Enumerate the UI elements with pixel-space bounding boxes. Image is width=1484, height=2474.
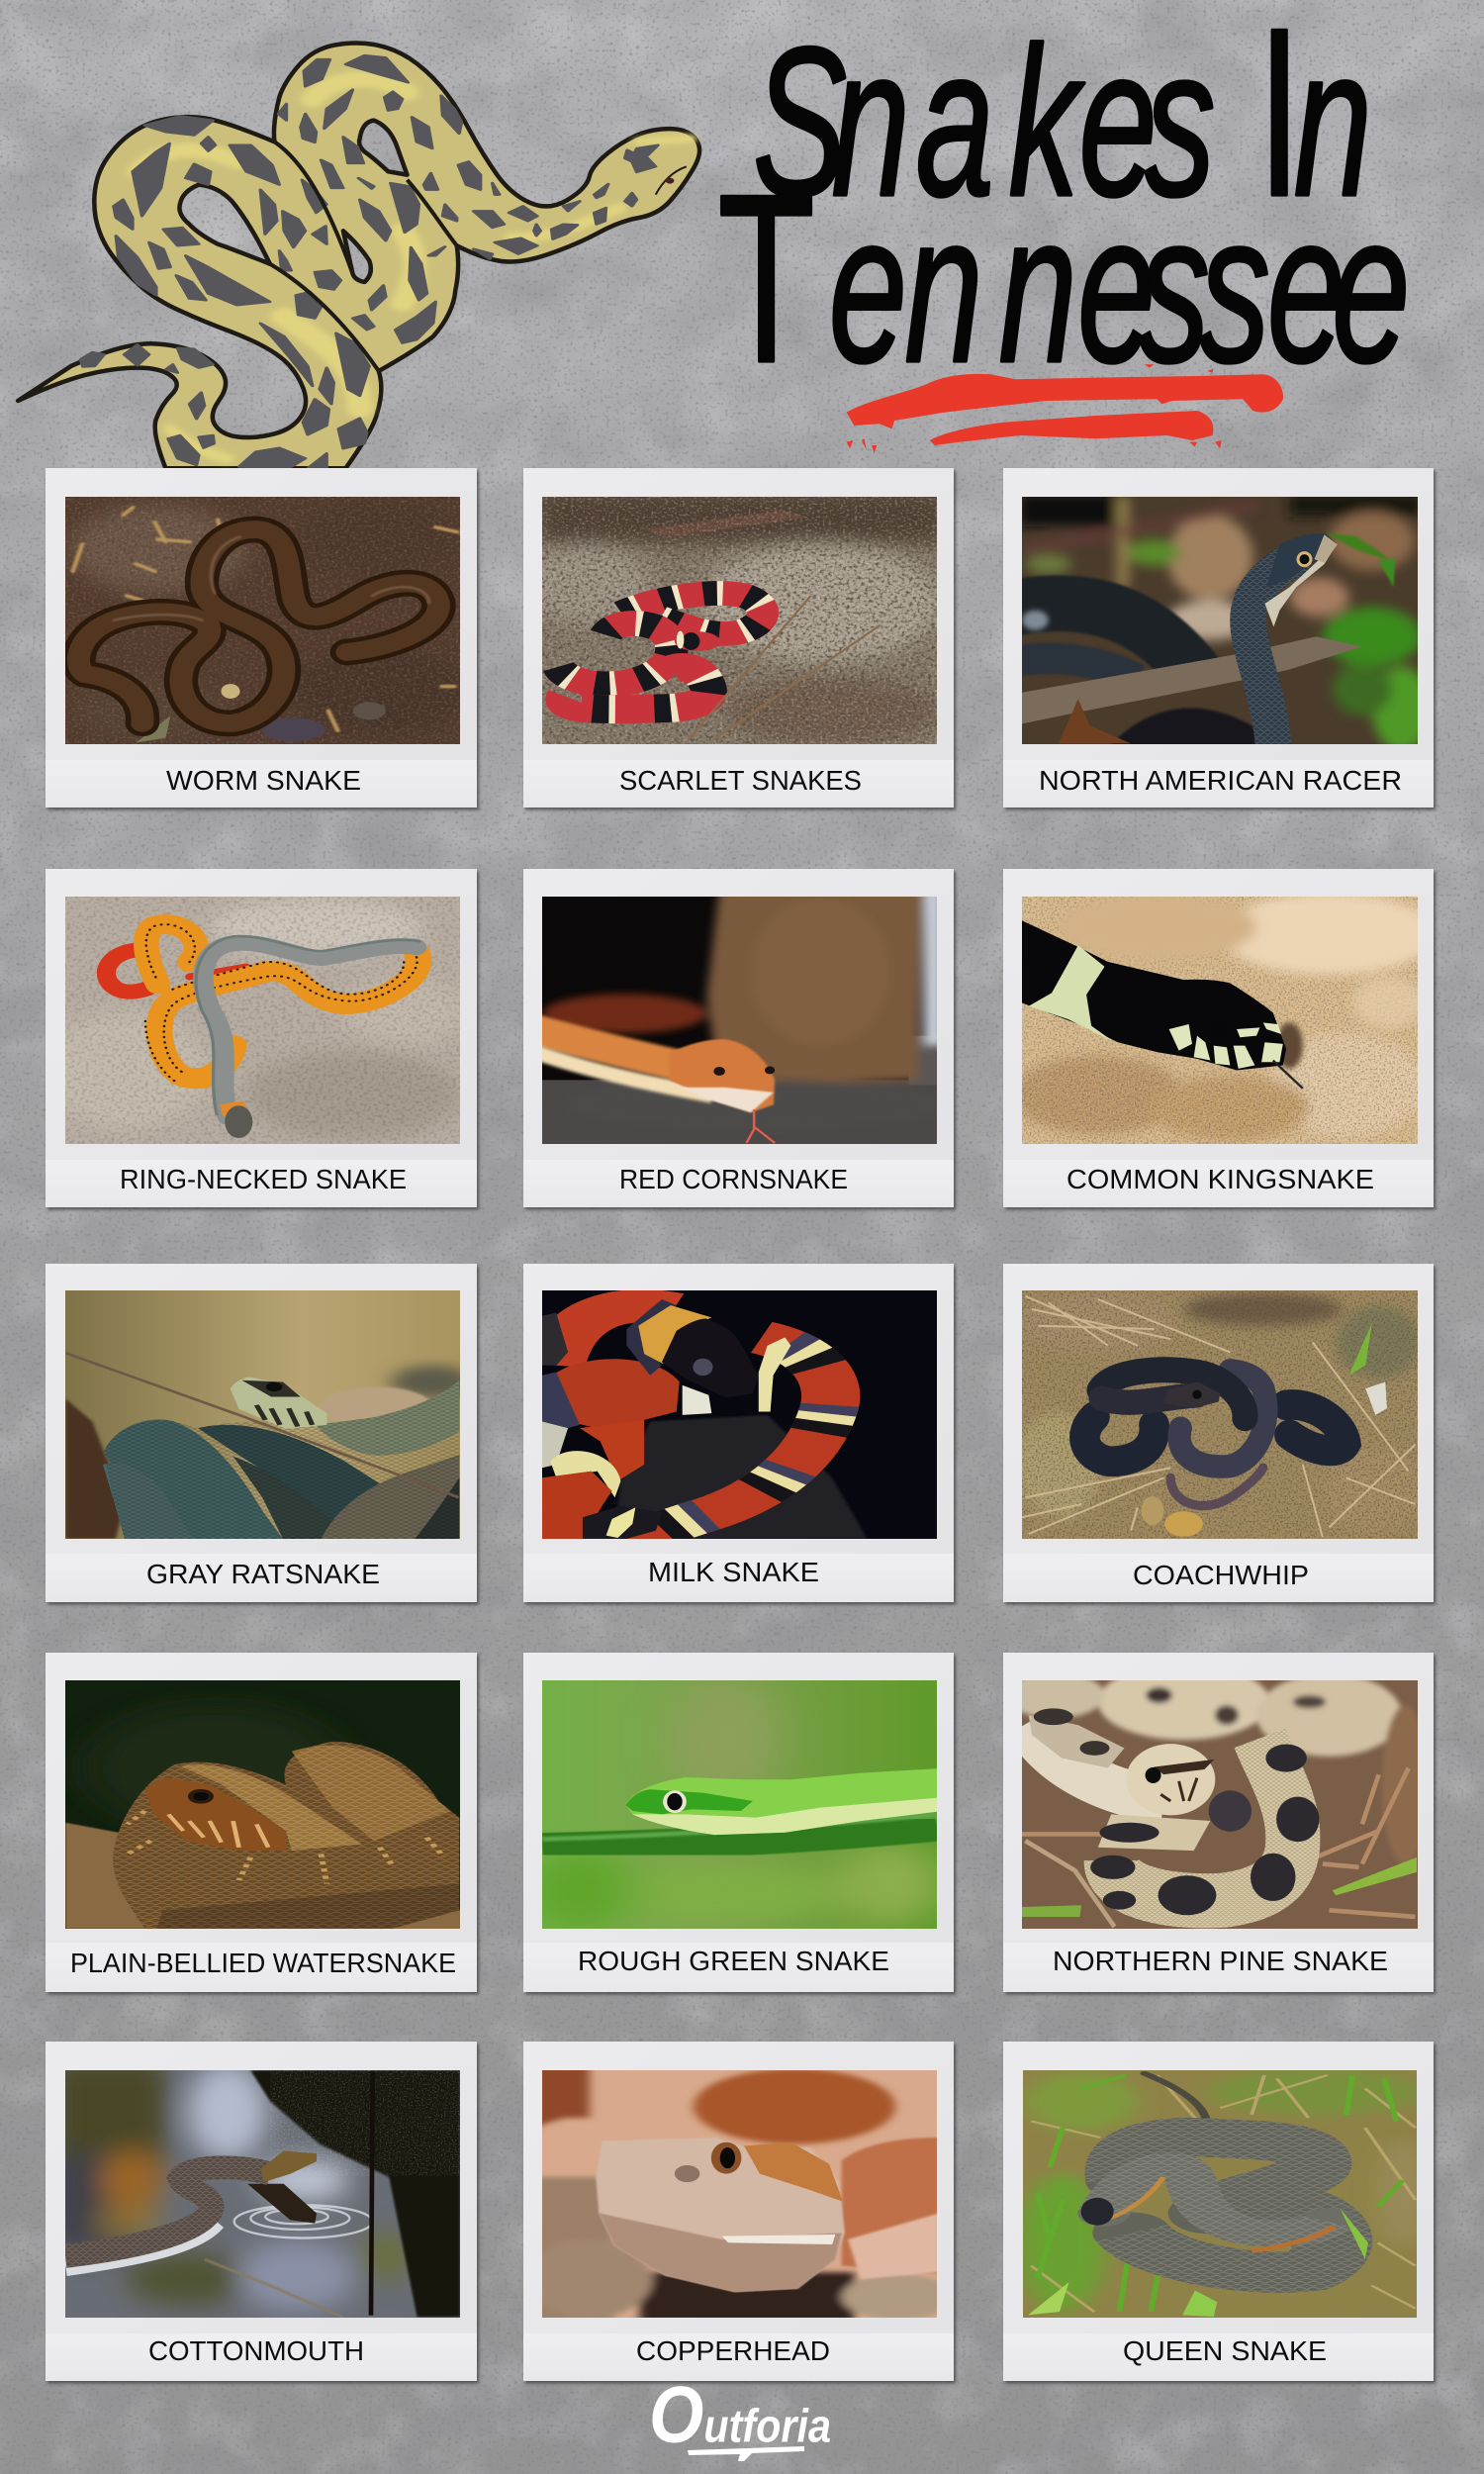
card frame <box>523 869 954 1207</box>
card frame <box>523 2042 954 2381</box>
card: red cornsnake <box>523 869 954 1207</box>
photo: scarlet snake on sand <box>542 497 937 744</box>
label: COACHWHIP <box>1133 1560 1309 1590</box>
photo: northern pine snake <box>1022 1680 1418 1929</box>
card: cottonmouth <box>46 2042 477 2381</box>
card frame <box>523 1653 954 1992</box>
card frame <box>1003 1264 1434 1602</box>
logo underline and f descender <box>688 2446 804 2461</box>
label: NORTH AMERICAN RACER <box>1039 765 1402 796</box>
label: WORM SNAKE <box>166 765 361 796</box>
label: NORTHERN PINE SNAKE <box>1053 1946 1388 1976</box>
card frame <box>46 1653 477 1992</box>
photo: coachwhip on pine needles <box>1022 1290 1418 1539</box>
card frame <box>523 468 954 808</box>
photo: rough green snake on stem <box>542 1680 937 1929</box>
photo: black racer rising behind branch <box>1022 497 1418 744</box>
card: common kingsnake <box>1003 869 1438 1207</box>
card frame <box>1003 1653 1434 1992</box>
card frame <box>1003 468 1434 808</box>
card frame <box>46 1264 477 1602</box>
photo: ring-necked snake on rock <box>65 897 460 1144</box>
card frame <box>46 869 477 1207</box>
label: RED CORNSNAKE <box>619 1164 848 1194</box>
title <box>718 0 1410 413</box>
logo: Outforia <box>649 2371 831 2461</box>
label: PLAIN-BELLIED WATERSNAKE <box>70 1948 456 1978</box>
card: scarlet snakes <box>523 468 954 808</box>
photo: copperhead close-up <box>542 2070 937 2318</box>
card: gray ratsnake <box>46 1264 477 1602</box>
logo wordmark: Outforia <box>649 2371 831 2459</box>
photo: kingsnake on gravel <box>1022 897 1418 1144</box>
card: north american racer <box>985 468 1434 808</box>
card: copperhead <box>523 2042 955 2381</box>
card frame <box>1003 869 1434 1207</box>
label: COTTONMOUTH <box>148 2335 364 2366</box>
label: ROUGH GREEN SNAKE <box>578 1946 889 1976</box>
label: COPPERHEAD <box>636 2335 830 2366</box>
card frame <box>523 1264 954 1602</box>
photo: milk snake on black <box>542 1290 937 1539</box>
photo: plain-bellied watersnake <box>65 1680 460 1929</box>
card frame <box>46 468 477 808</box>
card: ring-necked snake <box>45 869 477 1207</box>
photo: gray ratsnake coiled <box>65 1290 460 1539</box>
photo: worm snake on soil <box>65 497 460 744</box>
label: RING-NECKED SNAKE <box>120 1164 407 1194</box>
red brush underline <box>847 364 1283 453</box>
illustration: yellow spotted snake <box>18 43 699 468</box>
card frame <box>46 2042 477 2381</box>
label: MILK SNAKE <box>648 1557 819 1587</box>
card: worm snake <box>46 468 477 808</box>
card: queen snake <box>1003 2042 1434 2381</box>
photo: red cornsnake by stump <box>542 897 937 1144</box>
card: northern pine snake <box>1003 1653 1434 1992</box>
photo: cottonmouth in water <box>65 2070 460 2318</box>
card: plain-bellied watersnake <box>46 1653 477 1992</box>
title line 2: Tennessee <box>718 145 1410 413</box>
label: GRAY RATSNAKE <box>146 1559 380 1589</box>
label: SCARLET SNAKES <box>619 765 862 796</box>
card frame <box>1003 2042 1434 2381</box>
card: coachwhip <box>1003 1264 1434 1602</box>
label: COMMON KINGSNAKE <box>1067 1164 1374 1194</box>
label: QUEEN SNAKE <box>1123 2335 1327 2366</box>
photo: queen snake in grass <box>1023 2070 1417 2318</box>
card: milk snake <box>523 1264 954 1602</box>
card: rough green snake <box>523 1653 954 1992</box>
